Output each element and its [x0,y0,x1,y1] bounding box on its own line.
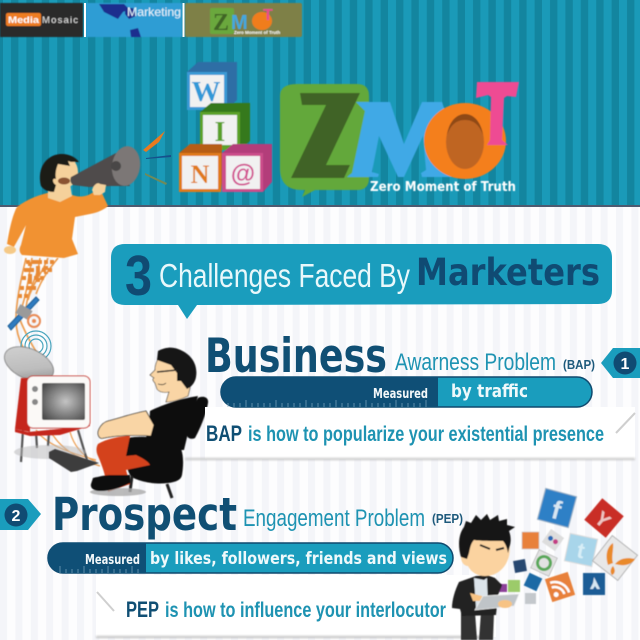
suit [452,575,502,616]
icon: small grey [525,593,536,604]
icon: small dark [513,559,527,573]
PEP definition: PEP [126,597,159,622]
top navigation strip [0,3,302,37]
nav tile: Media Mosaic: Media [8,15,40,26]
sound lines from megaphone [143,131,171,185]
icon: rss [545,572,575,602]
legs [461,612,494,640]
number badge 1: 1 [621,356,630,373]
tablet [475,594,519,610]
block @: @ [231,160,255,188]
tv casing [15,378,31,432]
neck [48,180,72,202]
measure bar: by likes, followers, friends and views [150,549,447,569]
chair legs [130,476,172,498]
white text card [96,575,496,637]
block N: N [191,160,210,189]
wires below the orange man [16,258,100,466]
letter T [476,82,519,145]
Awareness subtitle: Awarness Problem [395,349,556,376]
black shirt [145,396,198,450]
block W: W [192,76,220,108]
heading light text: Challenges Faced By [159,257,410,294]
face [461,532,510,576]
measure bar [221,376,592,407]
heading bubble [111,244,612,319]
panel: Prospect [0,488,496,638]
face [46,155,78,189]
mouth [58,178,70,184]
nav tile: ZMOT [185,3,302,37]
sweater [7,189,108,258]
nav tile: Media Mosaic: Mosaic [42,15,78,26]
icon: small purple [499,584,507,592]
set-top device [49,449,99,472]
icon: facebook: f [548,494,565,526]
shoe [91,475,130,491]
signal rings [21,331,51,361]
panel: Business [185,329,640,460]
number badge 2 [0,499,41,530]
hand right [498,600,512,608]
hand left [4,246,16,254]
icon: msn butterfly [593,536,637,580]
block I: I [215,117,225,148]
hand on megaphone [92,183,106,195]
megaphone [70,153,130,187]
card shadow line [185,458,635,460]
nav tile: Media Mosaic [0,3,83,37]
retro television [14,376,90,462]
chair back [187,397,208,439]
slash accent [616,413,635,433]
white nav dividers [84,3,184,37]
nav tile: ZMOT: Zero Moment of Truth [234,30,280,35]
Business title: Business [205,329,387,384]
nav tile: ZMOT: Z [213,10,229,36]
icon: yelp: Y [590,508,615,533]
neck and face [150,356,190,402]
glasses [157,370,177,372]
measure bar [48,542,453,573]
letter M [347,102,453,177]
Engagement subtitle: Engagement Problem [243,505,425,532]
chair seat [125,437,183,484]
icon: aim [583,573,605,595]
logo tagline: Zero Moment of Truth [370,179,516,195]
letter O [424,103,506,179]
icon: flickr [542,529,564,551]
card shadow line [96,636,486,638]
shadow under shoe [90,488,146,496]
nav tile: Marketing: Marketing [127,5,181,19]
businessman with tablet [452,514,519,640]
WIN@ toy blocks [179,62,272,192]
satellite [8,297,40,330]
smile [158,383,166,385]
social media icons [499,488,637,604]
butterfly wings [607,543,635,575]
Prospect title: Prospect [52,488,237,541]
measure bar: Measured [85,553,140,568]
screen [42,383,85,420]
slash accent [97,592,114,611]
white text card [205,407,635,459]
measure bar: by traffic [451,381,528,402]
icon: twitter: t [575,538,588,564]
icon: small green [508,580,520,592]
nav tile: Marketing [86,3,182,37]
knobs [32,386,38,392]
arm [98,411,154,438]
panel: Prospect: is how to influence your interlocutor [165,599,446,622]
ZMOT logo [280,82,519,197]
hair [40,154,79,192]
PEP tag: (PEP) [432,512,463,526]
icon: picasa [531,550,557,576]
nav tile: ZMOT: T [263,7,273,24]
hair [157,348,196,389]
number badge 1 [601,348,640,378]
red trousers [96,436,150,492]
measure bar: Measured [373,387,428,402]
eyes [480,545,504,550]
heading bold text: Marketers [416,251,600,294]
BAP definition: BAP [206,421,242,446]
satellite dish [0,340,59,388]
icon: small blue [524,573,542,591]
header band [0,0,640,207]
shirt [474,578,488,608]
icon: blogger [522,532,539,549]
nav tile: ZMOT: M [231,12,248,34]
BAP tag: (BAP) [563,358,595,372]
seated man watching TV [90,348,208,498]
bubble shape [111,244,612,319]
hand [470,593,485,601]
floor shadow [14,445,86,459]
numeral 3: 3 [125,244,152,308]
aim figure [590,577,600,589]
hair [459,514,515,559]
speech bubble with Z [280,84,369,197]
tv legs [21,430,87,462]
number badge 2: 2 [12,508,21,525]
orange man with megaphone [4,144,143,258]
